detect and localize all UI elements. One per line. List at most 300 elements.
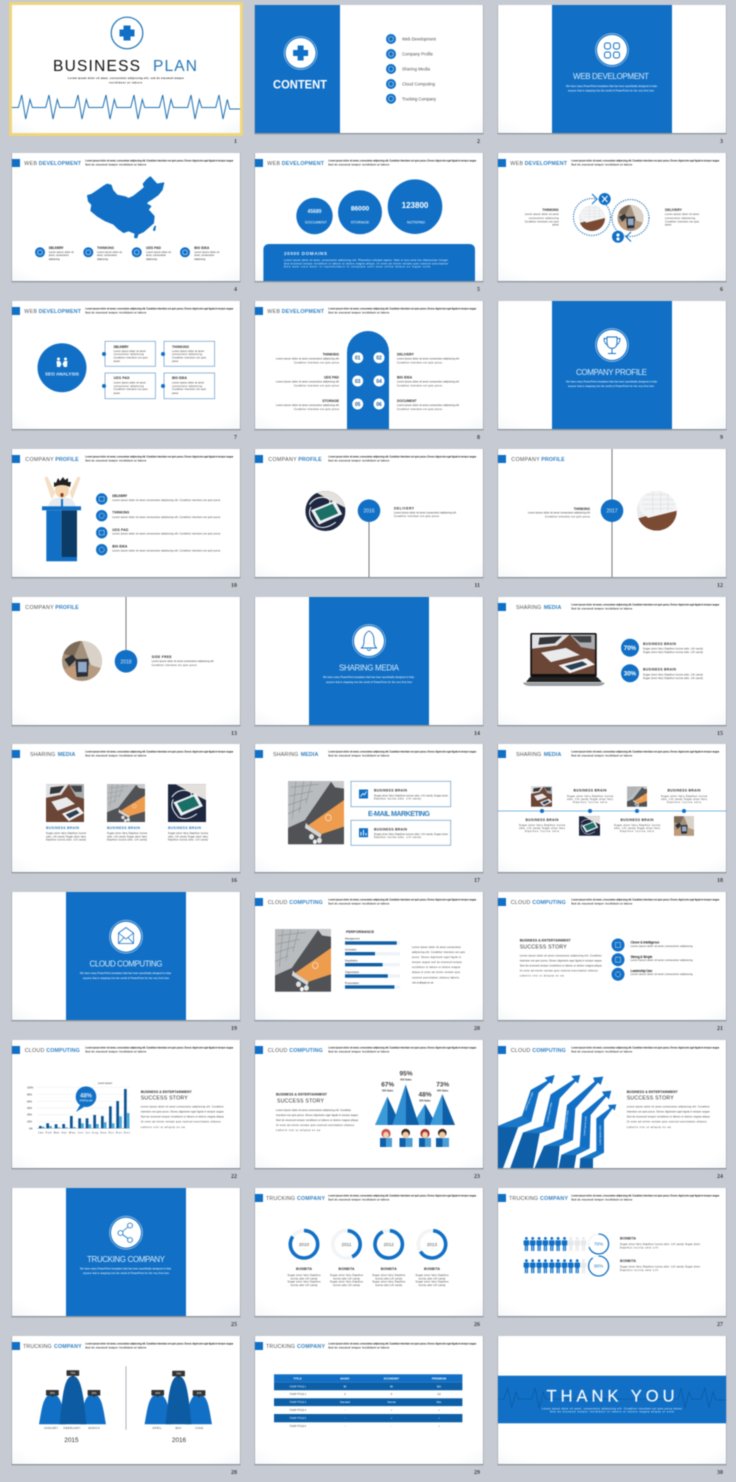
blue band xyxy=(498,1376,726,1423)
header: Lorem ipsum dolor sit amet, consectetur adipiscing elit. Curabitur interdum est quis purus. Donec dignissim eget ligula in tempor augue xyxy=(328,456,477,459)
percentage labels: 000 Sales xyxy=(382,1090,394,1092)
left text blocks: Curabitur interdum est quis purus xyxy=(294,384,340,388)
left text blocks: Curabitur interdum est quis purus xyxy=(294,362,340,364)
box: delivery: Curabitur interdum est quis xyxy=(114,356,148,360)
card three: BUSINESS BRAIN xyxy=(168,826,202,830)
page number: 1 xyxy=(234,139,237,145)
header: MEDIA xyxy=(544,752,561,758)
page number: 26 xyxy=(474,1322,480,1328)
header: Sed do eiusmod tempor incididunt ut labore xyxy=(571,1051,633,1054)
dashed circle photo left xyxy=(574,198,610,236)
table: $5 xyxy=(390,1385,393,1388)
callout bubble xyxy=(76,1086,96,1112)
story text: Sed do eiusmod tempor incididunt ut labore et dolore magna aliqua xyxy=(141,1116,224,1118)
header: Sed do eiusmod tempor incididunt ut labore xyxy=(571,608,633,611)
header: Lorem ipsum dolor sit amet, consectetur adipiscing elit. Curabitur interdum est quis purus. Donec dignissim eget ligula in tempor augue xyxy=(571,604,720,607)
blue band xyxy=(66,1188,186,1316)
section text xyxy=(566,381,658,388)
bell chart 2015 xyxy=(39,1376,106,1444)
section title: CLOUD COMPUTING xyxy=(90,960,162,968)
header: TRUCKING xyxy=(509,1196,538,1202)
header xyxy=(498,603,720,611)
item: uds pad: amet, consectetur xyxy=(146,254,166,257)
feature list: Lorem ipsum dolor sit amet consectetur adipiscing xyxy=(630,973,693,976)
header: Sed do eiusmod tempor incididunt ut labore xyxy=(328,1199,390,1202)
slide 1: business plan cover xyxy=(10,4,242,145)
page number: 8 xyxy=(477,435,480,441)
header: COMPUTING xyxy=(46,1048,80,1054)
story text: Sed do eiusmod tempor incididunt ut labore et dolore magna aliqua xyxy=(520,965,602,968)
table: Standard xyxy=(340,1401,351,1404)
ring 2012: BONBITA xyxy=(381,1267,397,1271)
box: delivery: Lorem ipsum dolor sit amet xyxy=(114,350,146,353)
photo: earbuds xyxy=(304,490,346,532)
timeline bottom text: Dapibus lucina odio xyxy=(525,830,560,833)
performance bar chart: Organization xyxy=(345,971,360,974)
chart tags 2015 xyxy=(46,1370,100,1397)
arch with numbers: 01 xyxy=(355,356,361,362)
slide 15: laptop and percentages xyxy=(498,597,726,737)
team avatars xyxy=(380,1129,449,1147)
header: Sed do eiusmod tempor incididunt ut labore xyxy=(328,312,390,315)
list item: big idea xyxy=(96,544,221,555)
arch with numbers: 03 xyxy=(355,379,361,385)
text one: BONBITA xyxy=(620,1236,637,1240)
slide 2: contents xyxy=(254,5,484,145)
left text blocks: UDS PAD xyxy=(324,376,340,380)
box: delivery: purus xyxy=(114,360,121,363)
right text blocks: DELIVERY xyxy=(397,352,415,356)
page number: 25 xyxy=(231,1322,237,1328)
header: PROFILE xyxy=(298,457,322,463)
header: Sed do eiusmod tempor incididunt ut labore xyxy=(85,312,147,315)
header: Lorem ipsum dolor sit amet, consectetur adipiscing elit. Curabitur interdum est quis purus. Donec dignissim eget ligula in tempor augue xyxy=(328,899,477,902)
ring 2013: 2013 xyxy=(427,1242,438,1247)
box: uds pad: Curabitur interdum est quis xyxy=(114,388,148,391)
timeline: 2016 xyxy=(363,509,375,515)
stat 30 percent: Sugar plum fairy Dapibus lucina odio. Lift candy xyxy=(643,674,704,676)
section text: anyone that is stepping into the world of PowerPoint for the very first time xyxy=(568,385,655,388)
timeline bottom text: odio. Lift candy Sugar plum fairy xyxy=(519,827,566,830)
timeline top text: Sugar plum fairy Dapibus lucina xyxy=(661,795,708,798)
story text: SUCCESS STORY xyxy=(627,1095,674,1101)
text one xyxy=(620,1236,700,1250)
page number: 5 xyxy=(477,287,480,293)
story text: Lorem ipsum dolor sit amet consectetur adipiscing elit. Curabitur xyxy=(520,955,602,958)
box two: BUSINESS BRAIN xyxy=(374,827,408,831)
box: uds pad: purus xyxy=(114,392,121,395)
page number: 11 xyxy=(474,583,480,589)
text: side free: Lorem ipsum dolor sit amet consectetur adipiscing elit xyxy=(152,660,214,663)
table: YOUR TITLE 1 xyxy=(289,1385,307,1388)
item: thinking: THINKING xyxy=(97,246,114,250)
table: PREMIUM xyxy=(432,1376,447,1380)
card two: Dapibus lucina odio. Lift candy xyxy=(107,839,148,842)
section text xyxy=(323,676,415,684)
ring 2013: lucina odio Lift candy xyxy=(418,1284,446,1287)
icon: bell xyxy=(352,624,386,658)
blue side panel: CONTENT xyxy=(273,80,327,92)
box one: BUSINESS BRAIN xyxy=(374,788,408,792)
bell chart 2015: MARCH xyxy=(88,1427,100,1430)
chart tags 2016: 70% xyxy=(176,1373,182,1376)
table: 3 xyxy=(344,1393,346,1396)
table: 5 xyxy=(391,1393,393,1396)
bar chart: 20% xyxy=(27,1114,33,1117)
story text: Laboris nisi ut aliquip ex ea xyxy=(627,1126,671,1129)
left text blocks: THINKING xyxy=(323,352,339,356)
header: COMPANY xyxy=(54,1344,82,1350)
page number: 7 xyxy=(234,435,237,441)
header: Sed do eiusmod tempor incididunt ut labore xyxy=(571,903,633,906)
item: thinking: Lorem ipsum dolor sit xyxy=(97,251,122,254)
box two: Sugar plum fairy Dapibus lucina odio. Lift candy Sugar plum xyxy=(374,833,448,836)
table: YOUR TITLE 6 xyxy=(289,1425,307,1428)
story text xyxy=(627,1090,710,1129)
timeline bottom text: Sugar plum fairy Dapibus lucina xyxy=(519,824,566,827)
percentage labels: 000 Sales xyxy=(400,1078,412,1082)
section title: TRUCKING COMPANY xyxy=(87,1255,166,1264)
slide 10: podium speaker xyxy=(12,449,240,589)
timeline bottom text: Sugar plum fairy Dapibus lucina xyxy=(614,824,661,827)
story text: SUCCESS STORY xyxy=(141,1095,188,1101)
bar chart: 40% xyxy=(27,1107,33,1110)
box: uds pad: Lorem ipsum dolor sit amet xyxy=(114,382,146,384)
slide 24: rising arrows xyxy=(498,1040,726,1180)
left text blocks: STORAGE xyxy=(322,399,340,403)
header: MEDIA xyxy=(58,752,75,758)
bubble: document: 45689 xyxy=(308,209,322,215)
list item: uds pad: Lorem ipsum dolor sit amet consectetur adipiscing elit. Curabitur interdum est quis purus xyxy=(112,533,221,536)
bar chart: Jan Feb Mar Apr May Jun Jul Aug Sep Oct Nov Dec xyxy=(38,1132,131,1135)
header: WEB xyxy=(24,309,37,315)
item: uds pad: adipiscing xyxy=(146,258,158,261)
paragraph: incididunt ut labore et dolore magna xyxy=(412,966,461,969)
table: $5 xyxy=(344,1385,347,1388)
header: WEB xyxy=(510,161,523,167)
story text: interdum est quis purus. Donec dignissim eget ligula in tempor augue xyxy=(520,960,602,963)
icon: trophy xyxy=(596,328,628,362)
item: thinking xyxy=(83,246,122,261)
table: $10 xyxy=(437,1385,442,1388)
list item: thinking: Lorem ipsum dolor sit amet consectetur adipiscing elit. Curabitur interdum est quis purus xyxy=(112,516,221,519)
header: Sed do eiusmod tempor incididunt ut labore xyxy=(85,164,147,167)
box two xyxy=(351,820,451,845)
page number: 13 xyxy=(231,731,237,737)
slide 20: performance bars xyxy=(254,892,484,1032)
left text: THINKING xyxy=(542,208,559,212)
story text: Ut enim ad minim veniam quis nostrud exercitation ullamco xyxy=(520,970,598,973)
stat 30 percent: BUSINESS BRAIN xyxy=(643,667,677,671)
story text: interdum est quis purus. Donec dignissim eget ligula in tempor augue xyxy=(627,1110,710,1114)
bar chart xyxy=(27,1082,131,1135)
slide 26: progress rings xyxy=(254,1188,484,1328)
box one xyxy=(351,781,451,807)
left text blocks: Curabitur interdum est quis purus xyxy=(294,408,340,411)
item: delivery xyxy=(35,246,74,261)
card two: BUSINESS BRAIN xyxy=(107,826,141,830)
header: CLOUD xyxy=(511,900,530,906)
ring 2011: lucina odio Lift candy xyxy=(333,1277,361,1280)
right text: DELIVERY xyxy=(665,208,683,212)
blue band xyxy=(552,301,672,429)
story text: Lorem ipsum dolor sit amet consectetur adipiscing elit. Curabitur xyxy=(276,1109,351,1112)
header: Lorem ipsum dolor sit amet, consectetur adipiscing elit. Curabitur interdum est quis purus. Donec dignissim eget ligula in tempor augue xyxy=(571,1047,720,1050)
header xyxy=(12,159,234,167)
header: CLOUD xyxy=(25,1048,44,1054)
section title: WEB DEVELOPMENT xyxy=(573,72,649,81)
section text: We have many PowerPoint templates that has been specifically designed to help xyxy=(566,85,658,88)
header: Sed do eiusmod tempor incididunt ut labore xyxy=(85,755,147,758)
header: SHARING xyxy=(273,752,298,758)
header: PROFILE xyxy=(541,457,565,463)
box: thinking: Curabitur interdum est quis xyxy=(172,356,207,360)
header: Sed do eiusmod tempor incididunt ut labore xyxy=(328,164,390,167)
card three: Dapibus lucina odio. Lift candy xyxy=(168,839,209,842)
photo: keyboard and phone xyxy=(287,780,345,846)
bar chart: 100% xyxy=(27,1086,34,1089)
header: COMPANY xyxy=(25,457,54,463)
header: Sed do eiusmod tempor incididunt ut labore xyxy=(328,755,390,758)
page number: 4 xyxy=(234,287,237,293)
header xyxy=(255,1342,477,1350)
header xyxy=(12,1342,234,1350)
callout bubble: 48% xyxy=(80,1094,93,1100)
left text xyxy=(525,208,559,226)
page number: 3 xyxy=(720,139,723,145)
header xyxy=(12,1046,234,1054)
table: - xyxy=(345,1417,346,1420)
ring 2013 xyxy=(416,1229,449,1287)
table: BASIC xyxy=(340,1376,350,1380)
ring 2011: 2011 xyxy=(342,1242,352,1247)
page number: 9 xyxy=(720,435,723,441)
story text: SUCCESS STORY xyxy=(277,1099,325,1105)
header xyxy=(255,898,477,906)
blue side panel xyxy=(255,5,340,133)
table: ✓ xyxy=(438,1409,440,1412)
story text: Sed do eiusmod tempor incididunt ut labore et dolore magna aliqua xyxy=(276,1119,359,1122)
timeline top text: odio. Lift candy Sugar plum fairy xyxy=(661,798,708,801)
item: delivery: amet, consectetur xyxy=(49,254,69,257)
ring 2011: Sugar plum fairy Dapibus xyxy=(330,1281,364,1284)
page number: 17 xyxy=(474,878,480,884)
item: thinking: adipiscing xyxy=(97,258,109,261)
SEO circle: SEO ANALYSIS xyxy=(45,371,79,376)
stat 70 percent: 70% xyxy=(624,645,637,652)
slide 18: horizontal timeline xyxy=(498,744,726,884)
timeline: 2017 xyxy=(606,509,618,515)
paragraph: nisi ut aliquip ex ea xyxy=(412,982,434,985)
photo: tablet xyxy=(61,640,102,682)
pictogram row 70 percent xyxy=(524,1237,586,1251)
box: big idea: consectetur adipiscing xyxy=(172,385,203,388)
feature list: Clever & Intelligence xyxy=(630,940,660,944)
right text blocks: Lorem ipsum dolor sit amet consectetur adipiscing elit xyxy=(397,380,459,384)
box: uds pad: consectetur adipiscing xyxy=(114,385,144,388)
ring 2013: Sugar plum fairy Dapibus xyxy=(416,1274,449,1277)
right text: consectetur adipiscing xyxy=(665,217,696,220)
story text xyxy=(141,1090,224,1129)
box: big idea: Lorem ipsum dolor sit amet xyxy=(172,382,204,384)
header: Sed do eiusmod tempor incididunt ut labore xyxy=(85,1051,147,1054)
list item: delivery: DELIVERY xyxy=(112,494,128,498)
header: COMPANY xyxy=(511,457,540,463)
bubble: notepad xyxy=(388,179,442,234)
right text: Curabitur interdum est quis xyxy=(665,220,700,223)
section text xyxy=(80,1268,172,1275)
timeline top text: BUSINESS BRAIN xyxy=(574,788,607,792)
slide 21: success story list xyxy=(498,892,726,1032)
paragraph: adipiscing elit. Curabitur interdum est quis xyxy=(412,951,466,954)
item: big idea xyxy=(180,246,220,261)
chart tags 2016 xyxy=(151,1371,205,1398)
bell chart 2016 xyxy=(145,1376,212,1444)
header xyxy=(498,750,720,758)
text: side free: SIDE FREE xyxy=(152,655,172,659)
box one: Dapibus lucina odio. Lift candy xyxy=(374,798,422,800)
header: Lorem ipsum dolor sit amet, consectetur adipiscing elit. Curabitur interdum est quis purus. Donec dignissim eget ligula in tempor augue xyxy=(328,751,477,754)
arrow captions: Lorem ipsum dolor xyxy=(523,1091,534,1111)
table: Normal xyxy=(387,1401,396,1404)
text one: Sugar plum fairy Dapibus lucina odio. Lift candy Sugar plum xyxy=(620,1243,700,1246)
header: COMPUTING xyxy=(289,1048,323,1054)
stat 70 percent: BUSINESS BRAIN xyxy=(643,642,677,646)
list item: thinking: THINKING xyxy=(112,511,130,515)
header: DEVELOPMENT xyxy=(282,161,325,167)
bell chart 2016: APRIL xyxy=(152,1427,162,1430)
header xyxy=(12,750,234,758)
slide 14: sharing media section xyxy=(254,597,484,737)
table: - xyxy=(345,1425,346,1428)
box: uds pad: UDS PAD xyxy=(114,376,130,380)
timeline bottom text: BUSINESS BRAIN xyxy=(526,818,559,822)
header xyxy=(255,159,477,167)
arch with numbers: 06 xyxy=(376,402,382,408)
header: SHARING xyxy=(516,605,541,611)
right text blocks: DOCUMENT xyxy=(397,399,418,403)
header: MEDIA xyxy=(544,605,561,611)
header: DEVELOPMENT xyxy=(39,309,82,315)
page number: 6 xyxy=(720,287,723,293)
timeline photos xyxy=(531,787,694,836)
subtitle: Lorem ipsum dolor sit amet, consectetur adipiscing elit, sed do eiusmod tempor xyxy=(68,77,184,80)
stat 30 percent xyxy=(621,664,704,682)
stat 30 percent: Sugar plum fairy Dapibus lucina odio. Lift candy xyxy=(643,677,704,680)
performance bar chart: Innovation xyxy=(345,949,357,952)
story text: Laboris nisi ut aliquip ex ea xyxy=(520,975,564,978)
ring 2010: Sugar plum fairy Dapibus xyxy=(288,1281,321,1284)
feature list: Lorem ipsum dolor sit amet consectetur adipiscing xyxy=(630,945,693,948)
timeline top text: odio. Lift candy Sugar plum fairy xyxy=(567,798,614,801)
arrow captions: Lorem ipsum dolor xyxy=(545,1102,553,1122)
header xyxy=(255,750,477,758)
domains panel: Sed eiusmod tempor incididunt ut labore et dolore magna aliqua. Ut enim ad minim veniam quis nostrud exercitation xyxy=(284,262,449,265)
right text xyxy=(665,208,700,226)
list item: delivery: Lorem ipsum dolor sit amet consectetur adipiscing elit. Curabitur interdum est quis purus xyxy=(112,499,221,502)
bubble: storage: STORAGE xyxy=(351,220,370,224)
page number: 23 xyxy=(474,1174,480,1180)
percentage labels: 000 Sales xyxy=(437,1090,449,1092)
slide 6: circular process xyxy=(498,153,726,293)
page number: 22 xyxy=(231,1174,237,1180)
arrow and icon bottom xyxy=(612,231,631,243)
ring 2013: lucina odio Lift candy xyxy=(418,1277,446,1280)
header: COMPUTING xyxy=(532,1048,566,1054)
ring 2011 xyxy=(330,1229,364,1287)
header: Lorem ipsum dolor sit amet, consectetur adipiscing elit. Curabitur interdum est quis purus. Donec dignissim eget ligula in tempor augue xyxy=(328,1047,477,1050)
box: big idea xyxy=(161,373,215,399)
left text: purus xyxy=(552,223,559,226)
feature list: Strong & Simple xyxy=(630,955,653,959)
left text: consectetur adipiscing xyxy=(529,217,559,220)
story text: Ut enim ad minim veniam quis nostrud exercitation ullamco xyxy=(276,1124,355,1127)
timeline rule xyxy=(498,809,726,813)
header: SHARING xyxy=(516,752,541,758)
e-mail marketing label: E-MAIL MARKETING xyxy=(368,811,431,818)
ring 2011: Sugar plum fairy Dapibus xyxy=(330,1274,364,1277)
bell chart 2015: JANUARY xyxy=(44,1427,58,1430)
header: Lorem ipsum dolor sit amet, consectetur adipiscing elit. Curabitur interdum est quis purus. Donec dignissim eget ligula in tempor augue xyxy=(85,1047,234,1050)
header: SHARING xyxy=(30,752,55,758)
bubble: notepad: NOTEPAD xyxy=(407,220,425,224)
ring 90 percent xyxy=(589,1256,609,1276)
header: COMPANY xyxy=(297,1196,325,1202)
box: thinking: purus xyxy=(172,360,179,363)
table: Max xyxy=(437,1401,442,1404)
box: big idea: purus xyxy=(172,392,179,395)
header xyxy=(12,603,79,611)
text: delivery: Lorem ipsum dolor sit amet consectetur adipiscing elit xyxy=(394,511,456,514)
bubble: storage: 86000 xyxy=(351,206,369,212)
ring 2012: lucina odio Lift candy xyxy=(375,1277,403,1280)
header: WEB xyxy=(24,161,37,167)
icon: medical cross xyxy=(111,17,143,49)
header: DEVELOPMENT xyxy=(282,309,325,315)
story text: Laboris nisi ut aliquip ex ea xyxy=(141,1126,185,1129)
timeline xyxy=(601,449,623,577)
story text: Laboris nisi ut aliquip ex ea xyxy=(276,1129,321,1132)
chart tags 2015: 30% xyxy=(50,1392,56,1395)
slide 16: three photos xyxy=(12,744,240,884)
page number: 14 xyxy=(474,731,480,737)
map of China xyxy=(88,177,164,238)
thank you text: Sed do eiusmod tempor incididunt ut labore et dolore magna aliqua ut enim xyxy=(550,1410,674,1414)
header: COMPANY xyxy=(25,605,54,611)
header: WEB xyxy=(267,161,280,167)
thank you title: THANK YOU xyxy=(546,1388,674,1406)
text: delivery xyxy=(394,506,456,518)
percentage labels: 000 Sales xyxy=(419,1100,431,1102)
ring 2012: lucina odio Lift candy xyxy=(375,1284,403,1287)
header: Sed do eiusmod tempor incididunt ut labore xyxy=(328,460,390,463)
left text blocks xyxy=(276,352,340,411)
header: Sed do eiusmod tempor incididunt ut labore xyxy=(328,903,390,906)
arrow captions: Lorem ipsum dolor xyxy=(563,1110,570,1130)
header xyxy=(255,1046,477,1054)
page number: 19 xyxy=(231,1026,237,1032)
table: ECONOMY xyxy=(384,1376,399,1380)
story text: BUSINESS & ENTERTAINMENT xyxy=(520,938,572,942)
timeline top text: Dapibus lucina odio xyxy=(667,801,702,804)
story text: SUCCESS STORY xyxy=(520,944,567,950)
story text xyxy=(276,1092,359,1132)
contents list: Company Profile xyxy=(402,52,434,57)
percentage labels xyxy=(381,1071,449,1102)
box: delivery: consectetur adipiscing xyxy=(114,353,144,356)
slide 19: cloud computing section xyxy=(12,892,240,1032)
photo: keyboard xyxy=(637,491,678,532)
